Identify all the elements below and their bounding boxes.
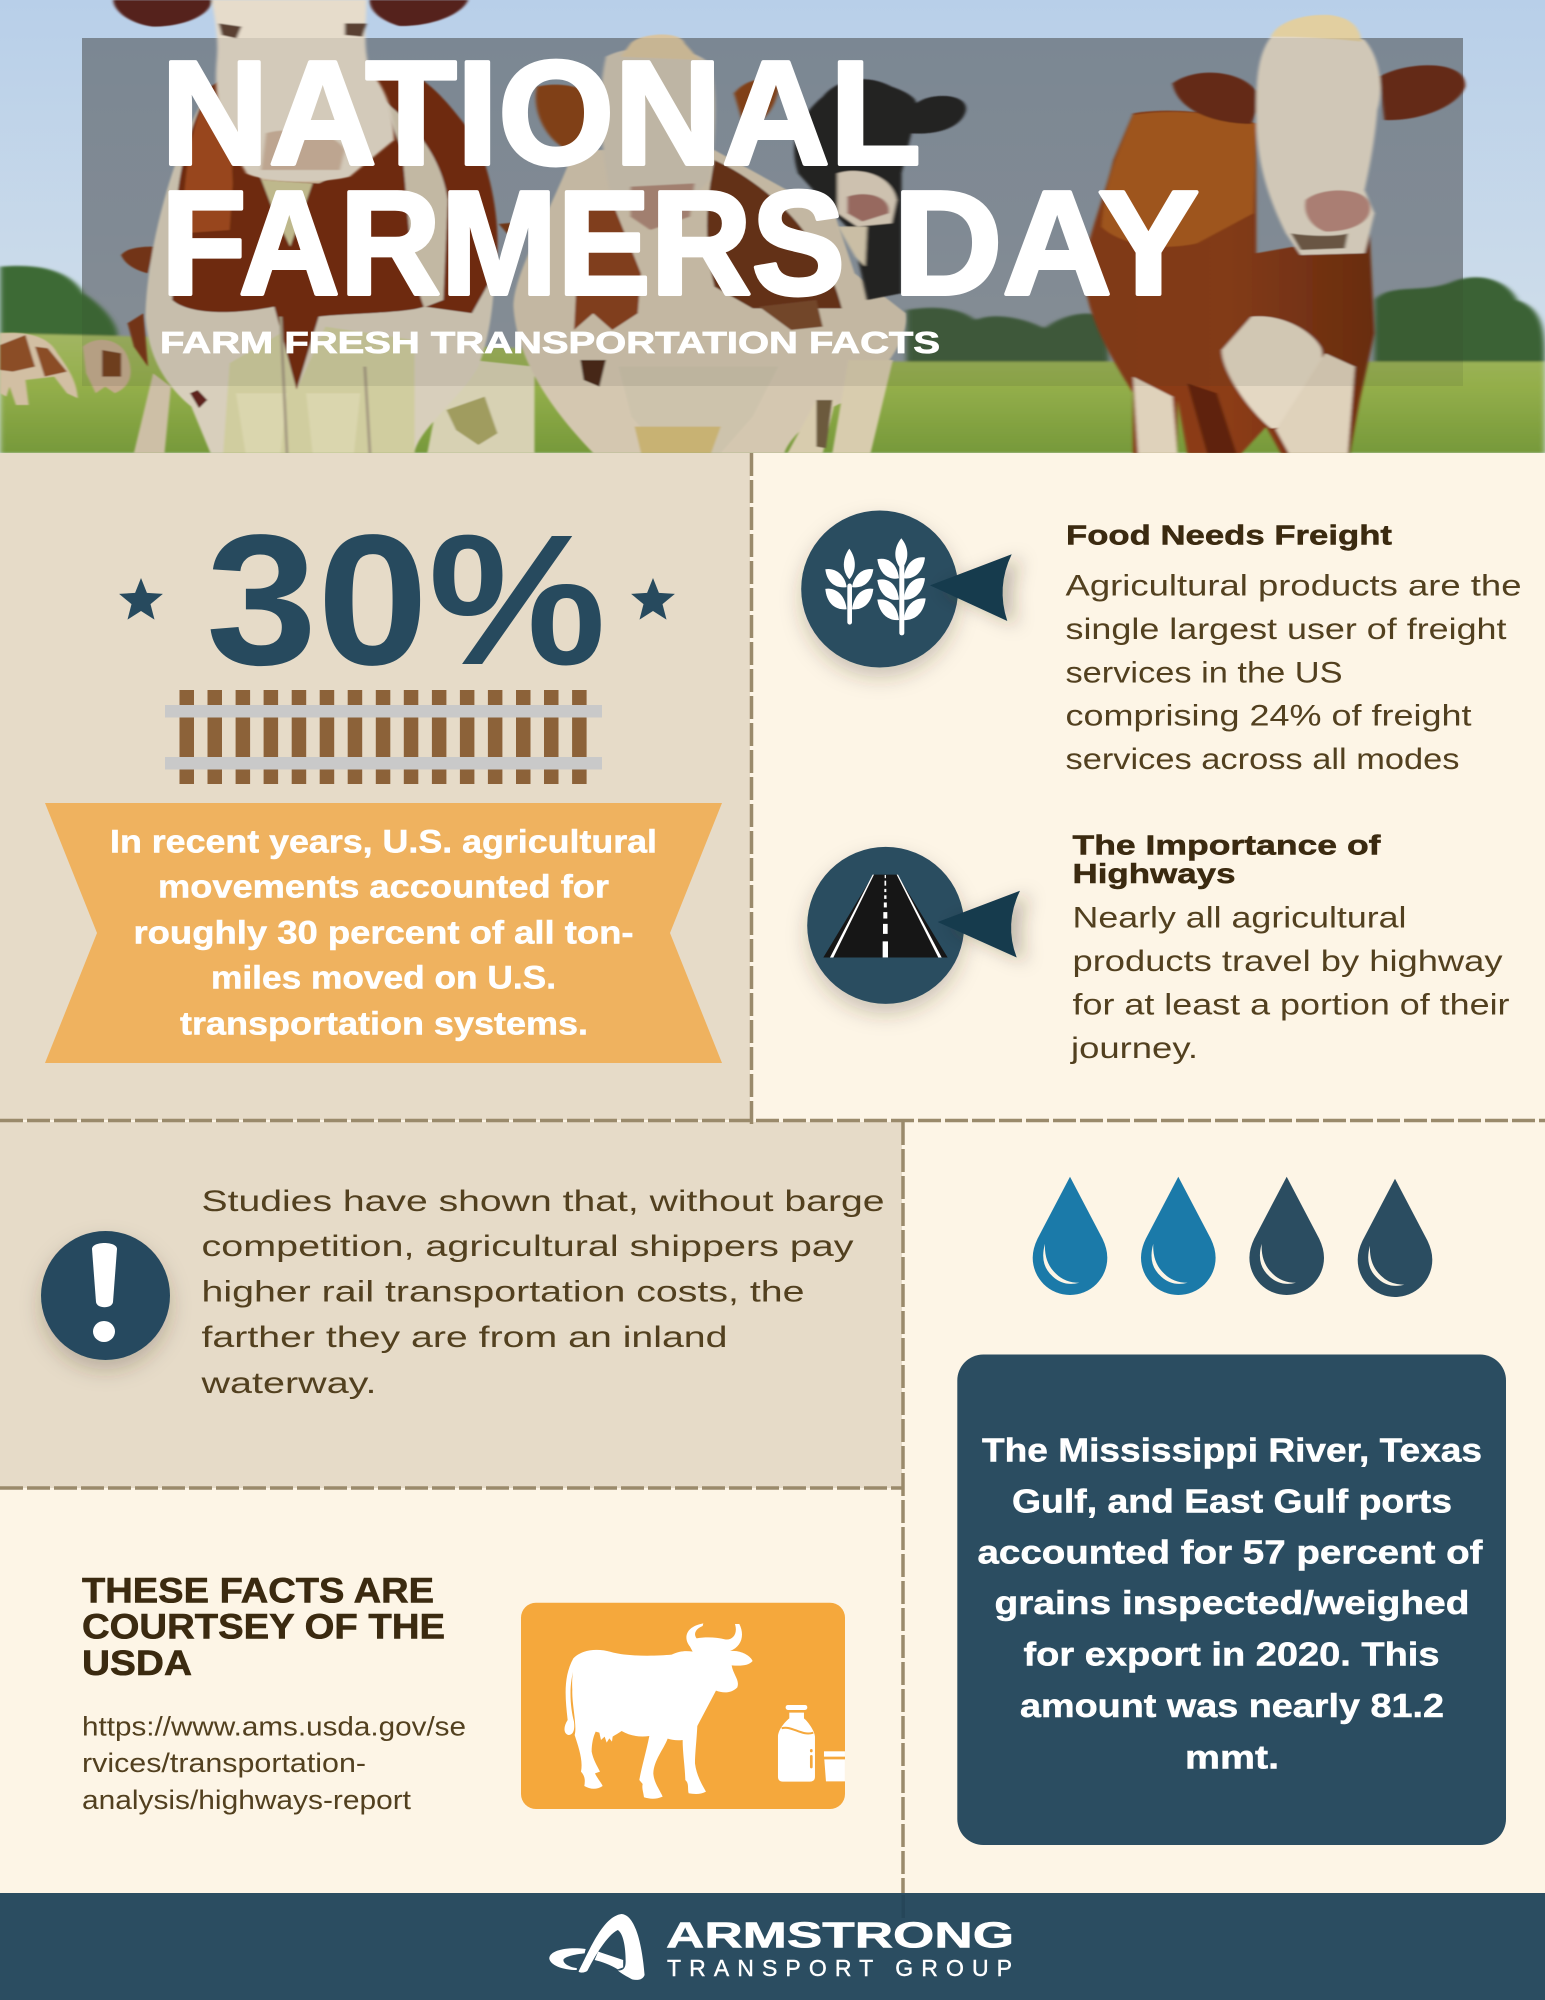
body text: services in the US	[1066, 656, 1342, 690]
panel: barge competition	[0, 1122, 902, 1488]
body text: waterway.	[200, 1367, 376, 1400]
icon: exclamation mark	[41, 1231, 170, 1360]
left cow head	[212, 0, 394, 181]
ribbon text	[110, 824, 657, 1042]
ribbon text: movements accounted for	[158, 868, 609, 904]
left cow back leg	[134, 373, 171, 453]
icon: Armstrong logo	[549, 1914, 645, 1980]
callout text: The Mississippi River, Texas	[982, 1432, 1482, 1468]
center dark cow	[794, 79, 966, 300]
panel: source credit	[82, 1572, 845, 1815]
panel: food needs freight	[801, 510, 1522, 776]
center cow head	[536, 79, 778, 147]
callout text	[978, 1432, 1484, 1776]
callout text: Gulf, and East Gulf ports	[1012, 1482, 1452, 1520]
ribbon text: transportation systems.	[180, 1006, 588, 1042]
ribbon text: roughly 30 percent of all ton-	[134, 914, 634, 950]
heading: Highways	[1072, 858, 1236, 889]
company name: TRANSPORT GROUP	[667, 1955, 1012, 1981]
title: FARMERS	[161, 161, 845, 326]
panel: importance of highways	[807, 830, 1510, 1065]
callout text: grains inspected/weighed	[994, 1584, 1470, 1621]
heading: THESE FACTS ARE	[82, 1572, 434, 1610]
body text: competition, agricultural shippers pay	[202, 1230, 854, 1263]
source link	[82, 1712, 466, 1815]
body text: farther they are from an inland	[202, 1321, 728, 1354]
heading: Food Needs Freight	[1066, 520, 1392, 550]
body text: services across all modes	[1066, 743, 1460, 776]
title	[161, 31, 1199, 326]
behind cow	[427, 360, 534, 453]
company name: ARMSTRONG	[666, 1914, 1014, 1956]
icon: road in circle	[807, 847, 964, 1004]
big number: 30%	[206, 497, 606, 704]
source link: https://www.ams.usda.gov/se	[82, 1712, 466, 1742]
icon: water drops	[1033, 1177, 1432, 1297]
right cow	[1084, 111, 1374, 453]
body text: higher rail transportation costs, the	[202, 1276, 804, 1308]
subtitle: FARM FRESH TRANSPORTATION FACTS	[160, 325, 940, 360]
icon: cow and milk	[521, 1603, 845, 1809]
header photo: cows in a field	[0, 0, 1545, 453]
body text: Agricultural products are the	[1066, 570, 1522, 602]
body text: journey.	[1070, 1032, 1198, 1065]
icon: left star	[119, 578, 163, 620]
ribbon text: miles moved on U.S.	[211, 960, 556, 996]
icon: wheat in circle	[801, 510, 958, 668]
source link: rvices/transportation-	[82, 1748, 366, 1778]
body text: products travel by highway	[1072, 945, 1502, 978]
title: DAY	[893, 161, 1199, 326]
body text	[1066, 570, 1522, 776]
heading: The Importance of	[1072, 830, 1381, 860]
panel: water drops and export fact	[957, 1177, 1506, 1845]
callout text: amount was nearly 81.2	[1020, 1687, 1444, 1724]
panel: 30 percent	[0, 453, 750, 1120]
arrow	[938, 891, 1020, 958]
callout text: mmt.	[1185, 1738, 1279, 1776]
left cow body	[145, 70, 494, 453]
company name	[666, 1914, 1014, 1981]
source link: analysis/highways-report	[82, 1785, 412, 1815]
arrow	[930, 554, 1012, 621]
body text: Nearly all agricultural	[1072, 902, 1406, 934]
body text	[1070, 902, 1510, 1065]
dark callout box	[957, 1354, 1506, 1845]
body text: for at least a portion of their	[1072, 988, 1510, 1022]
heading	[1072, 830, 1381, 889]
body text	[200, 1185, 885, 1400]
center cow body	[513, 150, 906, 453]
ribbon text: In recent years, U.S. agricultural	[110, 824, 657, 860]
icon: right star	[631, 578, 675, 620]
heading	[82, 1572, 445, 1683]
heading: COURTSEY OF THE	[82, 1608, 445, 1646]
heading: USDA	[82, 1644, 192, 1683]
title: NATIONAL	[161, 31, 921, 196]
body text: comprising 24% of freight	[1066, 700, 1472, 732]
footer bar	[0, 1893, 1545, 2000]
body text: single largest user of freight	[1066, 613, 1507, 646]
ribbon	[45, 803, 722, 1063]
icon: railroad track	[165, 690, 602, 784]
body text: Studies have shown that, without barge	[202, 1185, 884, 1218]
callout text: for export in 2020. This	[1024, 1636, 1440, 1672]
callout text: accounted for 57 percent of	[978, 1534, 1484, 1570]
